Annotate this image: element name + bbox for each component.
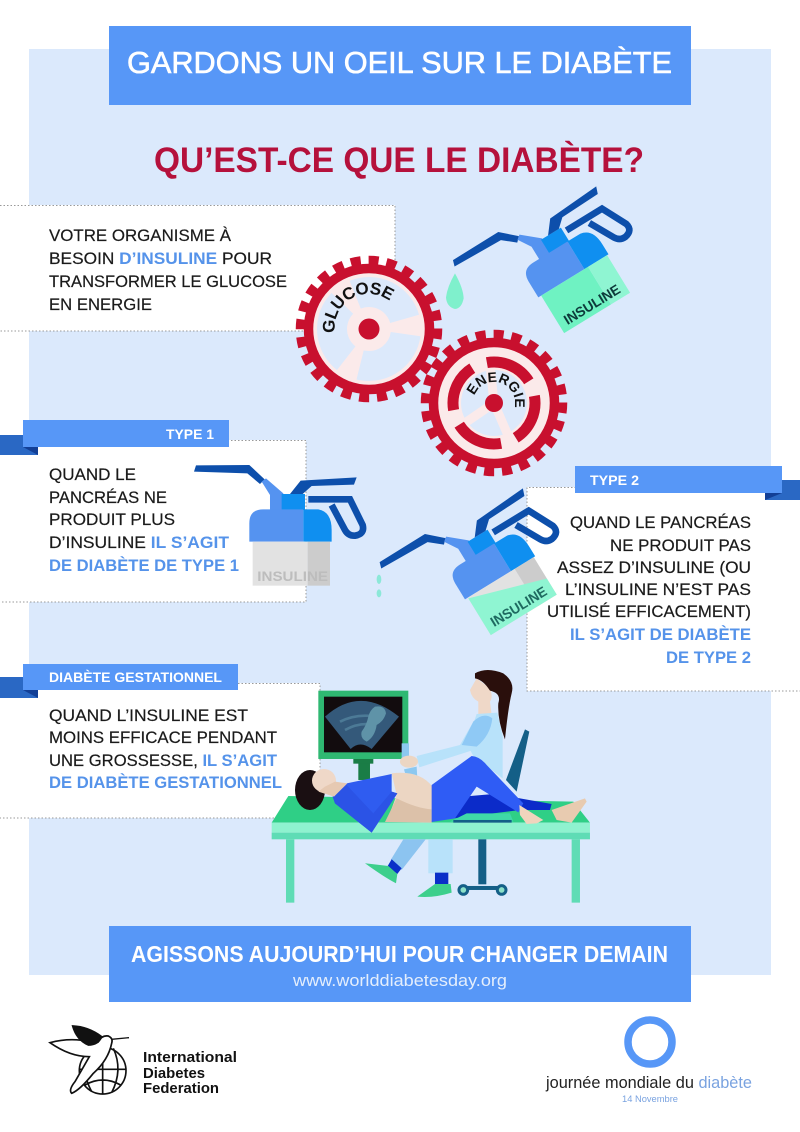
panel: definition — [0, 205, 395, 331]
panel: definition: BESOIN D’INSULINE POUR — [49, 249, 272, 268]
gear: glucose: GLUCOSE — [322, 282, 395, 332]
panel: definition: EN ENERGIE — [49, 295, 152, 314]
logo: international diabetes federation: Diabetes — [143, 1065, 205, 1082]
gear: energie — [420, 330, 568, 476]
icon: insulin can partial: INSULINE — [487, 583, 550, 630]
panel: type 2: UTILISÉ EFFICACEMENT) — [547, 602, 751, 621]
panel: type 1: D’INSULINE IL S’AGIT — [49, 533, 230, 552]
icon: insulin can empty: INSULINE — [257, 568, 328, 584]
title banner — [109, 26, 691, 105]
panel: type 2: ASSEZ D’INSULINE (OU — [557, 558, 751, 577]
monitor — [318, 691, 408, 780]
panel: type 2: L’INSULINE N’EST PAS — [565, 580, 751, 599]
panel: type 1: DE DIABÈTE DE TYPE 1 — [49, 556, 239, 575]
panel: type 2: TYPE 2 — [590, 472, 639, 488]
panel: type 2: QUAND LE PANCRÉAS — [570, 513, 751, 532]
panel: type 2: IL S’AGIT DE DIABÈTE — [570, 625, 751, 644]
panel: gestational: DIABÈTE GESTATIONNEL — [49, 669, 222, 685]
panel: gestational: DE DIABÈTE GESTATIONNEL — [49, 773, 282, 792]
logo: journée mondiale du diabète: journée mondiale du diabète — [545, 1073, 752, 1092]
patient — [295, 756, 587, 833]
panel: type 2: DE TYPE 2 — [666, 648, 751, 667]
panel: type 1: QUAND LE — [49, 465, 136, 484]
title banner: GARDONS UN OEIL SUR LE DIABÈTE — [127, 45, 672, 80]
footer banner: www.worlddiabetesday.org — [292, 971, 507, 990]
icon: insulin can partial — [377, 475, 585, 666]
illustration: ultrasound exam — [272, 670, 590, 903]
heading: QU’EST-CE QUE LE DIABÈTE? — [154, 140, 644, 180]
panel: type 1 — [0, 420, 306, 602]
icon: insulin can full — [446, 173, 658, 364]
footer banner: AGISSONS AUJOURD’HUI POUR CHANGER DEMAIN — [131, 941, 668, 967]
doctor — [365, 670, 512, 897]
panel: gestational: MOINS EFFICACE PENDANT — [49, 728, 277, 747]
panel: gestational — [0, 664, 320, 818]
logo: journée mondiale du diabète — [545, 1020, 752, 1104]
panel: type 1: PRODUIT PLUS — [49, 510, 175, 529]
logo: international diabetes federation: Federation — [143, 1080, 219, 1097]
panel: type 1: TYPE 1 — [166, 426, 214, 442]
panel: definition: TRANSFORMER LE GLUCOSE — [49, 272, 287, 291]
panel: gestational: UNE GROSSESSE, IL S’AGIT — [49, 751, 278, 770]
logo: international diabetes federation — [50, 1026, 237, 1097]
panel: gestational: QUAND L’INSULINE EST — [49, 706, 248, 725]
background panel — [29, 49, 771, 975]
stool and chair — [459, 729, 529, 894]
icon: insulin can empty — [194, 465, 363, 586]
panel: definition: VOTRE ORGANISME À — [49, 226, 232, 245]
gear: energie: ENERGIE — [466, 372, 525, 408]
table — [272, 796, 590, 903]
panel: type 2: NE PRODUIT PAS — [610, 536, 751, 555]
panel: type 2 — [527, 466, 800, 691]
icon: insulin can full: INSULINE — [561, 281, 623, 328]
footer banner — [109, 926, 691, 1002]
logo: journée mondiale du diabète: 14 Novembre — [622, 1094, 678, 1104]
gear: glucose — [296, 256, 442, 402]
logo: international diabetes federation: International — [143, 1049, 237, 1066]
panel: type 1: PANCRÉAS NE — [49, 488, 167, 507]
